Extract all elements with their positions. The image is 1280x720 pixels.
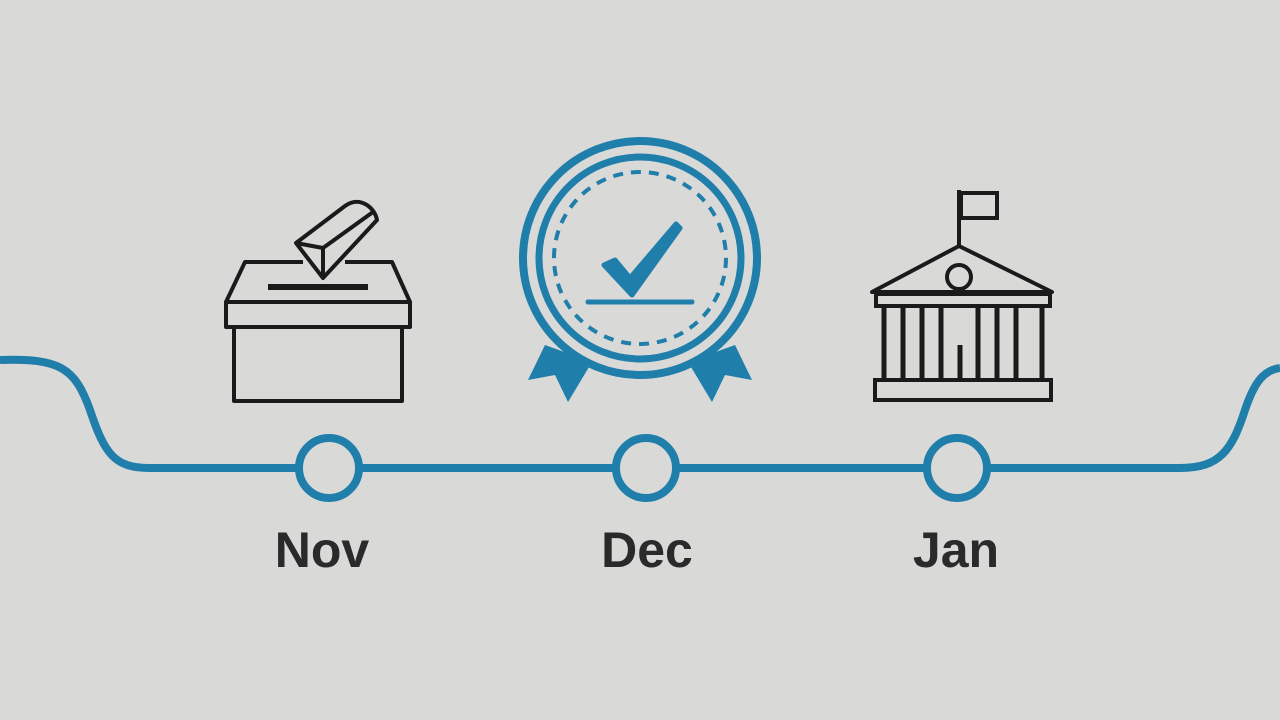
icon: medal with checkmark <box>523 141 757 402</box>
marker: Nov <box>299 438 359 498</box>
label: Nov: Nov <box>275 522 369 578</box>
marker: Dec <box>616 438 676 498</box>
timeline line <box>0 360 1280 468</box>
icon: ballot box <box>226 202 410 401</box>
label: Jan: Jan <box>913 522 999 578</box>
marker: Jan <box>927 438 987 498</box>
icon: government building <box>872 190 1052 400</box>
label: Dec: Dec <box>601 522 693 578</box>
